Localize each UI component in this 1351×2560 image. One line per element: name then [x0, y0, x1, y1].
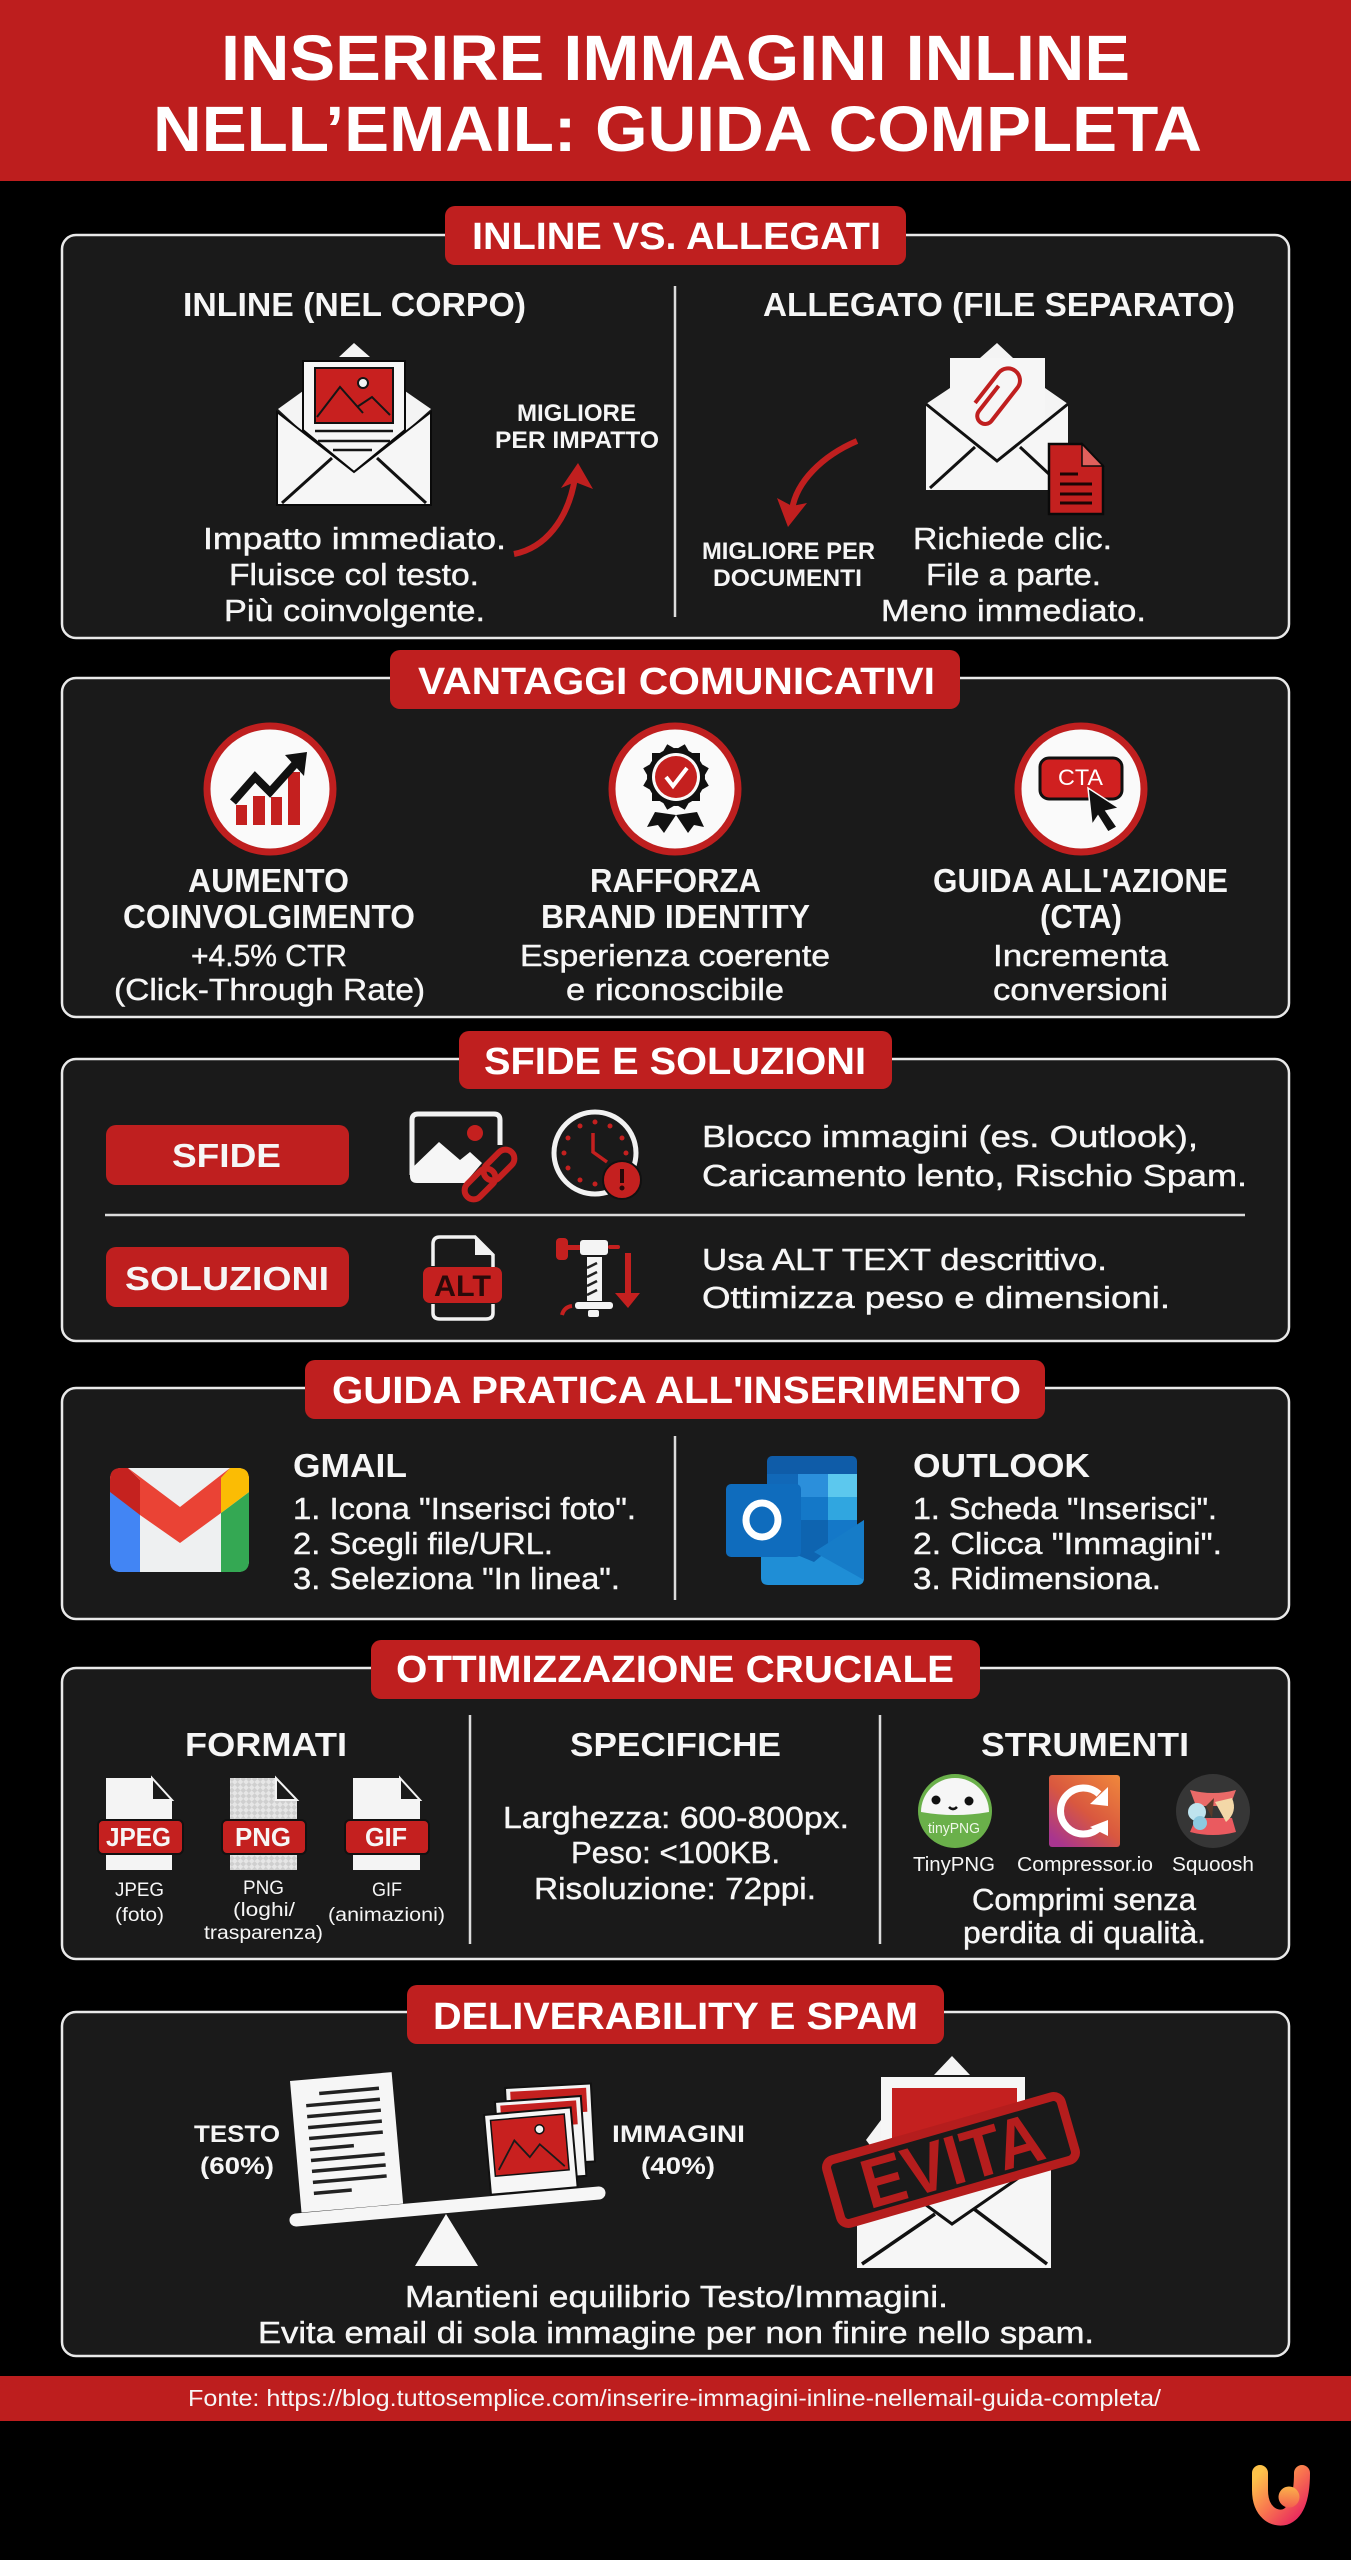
label: sfide [106, 1125, 349, 1185]
icon: brand logo [1260, 2473, 1302, 2518]
icon: jpeg file: JPEG [106, 1822, 171, 1852]
text: guida all'azione: GUIDA ALL'AZIONE [933, 862, 1228, 899]
text: format captions [115, 1878, 445, 1944]
title: NELL’EMAIL: GUIDA COMPLETA [153, 93, 1202, 165]
text: comprimi: perdita di qualità. [963, 1915, 1206, 1950]
icon: growth chart [207, 726, 333, 852]
panel: ottimizzazione cruciale [62, 1640, 1289, 1959]
callout: migliore per impatto [495, 400, 659, 454]
text: format captions: (animazioni) [328, 1905, 445, 1926]
title: INSERIRE IMMAGINI INLINE [221, 22, 1130, 94]
text: format captions: trasparenza) [204, 1923, 323, 1944]
text: soluzioni list [702, 1242, 1170, 1315]
text: rafforza brand identity: BRAND IDENTITY [541, 898, 810, 935]
icon: clock alert [554, 1112, 641, 1199]
column: specifiche [503, 1726, 849, 1906]
icon: cta button: CTA [1058, 765, 1103, 790]
panel: guida pratica [62, 1360, 1289, 1619]
callout: migliore per impatto: MIGLIORE [517, 400, 636, 427]
text: guida all'azione: Incrementa [993, 938, 1169, 973]
text: allegato notes [881, 521, 1146, 628]
text: specifiche values: Peso: <100KB. [571, 1835, 780, 1870]
label: immagini 40%: IMMAGINI [612, 2121, 745, 2148]
panel: sfide e soluzioni [62, 1031, 1289, 1341]
text: outlook steps: 2. Clicca "Immagini". [913, 1526, 1222, 1561]
column: strumenti [913, 1726, 1254, 1950]
text: aumento coinvolgimento: AUMENTO [188, 862, 349, 899]
text: tool names: TinyPNG [913, 1854, 995, 1876]
text: comprimi: Comprimi senza [972, 1882, 1197, 1917]
icon: text page [290, 2072, 403, 2212]
text: gmail steps: 2. Scegli file/URL. [293, 1526, 553, 1561]
icon: gif file [345, 1778, 429, 1870]
text: allegato notes: File a parte. [926, 557, 1101, 592]
column heading: allegato: ALLEGATO (FILE SEPARATO) [763, 286, 1235, 323]
text: rafforza brand identity: RAFFORZA [590, 862, 761, 899]
text: specifiche values: Risoluzione: 72ppi. [534, 1871, 816, 1906]
heading: inline vs allegati [445, 206, 906, 265]
icon: tinypng: tinyPNG [928, 1820, 980, 1837]
text: sfide list: Caricamento lento, Rischio Spam. [702, 1158, 1247, 1193]
text: inline benefits: Impatto immediato. [203, 521, 506, 556]
callout: migliore per documenti: MIGLIORE PER [702, 538, 875, 565]
icon: tinypng [918, 1774, 992, 1848]
heading: deliverability: DELIVERABILITY E SPAM [433, 1996, 918, 2038]
text: aumento coinvolgimento [114, 862, 425, 1007]
text: guida all'azione: (CTA) [1040, 898, 1122, 935]
icon: compress clamp [556, 1238, 640, 1317]
heading: formati: FORMATI [185, 1726, 347, 1763]
arrow: to migliore per documenti [777, 441, 857, 527]
heading: guida pratica: GUIDA PRATICA ALL'INSERIMENTO [332, 1370, 1021, 1412]
icon: photo stack [484, 2083, 595, 2195]
heading: ottimizzazione cruciale: OTTIMIZZAZIONE CRUCIALE [396, 1649, 954, 1691]
text: rafforza brand identity [520, 862, 830, 1007]
text: format captions: JPEG [115, 1880, 164, 1901]
text: equilibrio: Evita email di sola immagine per non finire nello spam. [258, 2315, 1094, 2350]
footer source bar: Fonte: https://blog.tuttosemplice.com/inserire-immagini-inline-nellemail-guida-completa/ [188, 2385, 1162, 2411]
icon: envelope with inline image [277, 343, 431, 505]
icon: jpeg file [98, 1778, 183, 1870]
label: immagini 40%: (40%) [641, 2153, 715, 2180]
text: tool names: Compressor.io [1017, 1854, 1153, 1876]
icon: compressor.io [1049, 1775, 1120, 1847]
callout: migliore per impatto: PER IMPATTO [495, 427, 659, 454]
text: gmail steps: GMAIL [293, 1447, 407, 1484]
text: equilibrio [258, 2279, 1094, 2350]
text: aumento coinvolgimento: +4.5% CTR [191, 938, 347, 973]
text: equilibrio: Mantieni equilibrio Testo/Immagini. [405, 2279, 948, 2314]
text: rafforza brand identity: Esperienza coerente [520, 938, 830, 973]
label: testo 60%: TESTO [194, 2121, 280, 2148]
icon: alt text file: ALT [434, 1270, 491, 1303]
text: sfide list [702, 1119, 1247, 1193]
stamp: evita: EVITA [852, 2098, 1052, 2224]
label: soluzioni [106, 1247, 349, 1307]
heading: guida pratica [305, 1360, 1045, 1419]
text: specifiche values: Larghezza: 600-800px. [503, 1800, 849, 1835]
text: format captions: (loghi/ [233, 1900, 296, 1921]
callout: migliore per documenti: DOCUMENTI [713, 565, 862, 592]
text: gmail steps: 3. Seleziona "In linea". [293, 1561, 620, 1596]
panel: inline vs allegati [62, 206, 1289, 638]
text: tool names [913, 1854, 1254, 1876]
icon: png file: PNG [235, 1822, 291, 1852]
label: sfide: SFIDE [172, 1137, 281, 1174]
label: soluzioni: SOLUZIONI [125, 1260, 329, 1297]
heading: inline vs allegati: INLINE VS. ALLEGATI [472, 216, 881, 258]
header banner [0, 0, 1351, 181]
footer source bar [0, 2376, 1351, 2421]
text: soluzioni list: Ottimizza peso e dimensioni. [702, 1280, 1170, 1315]
heading: vantaggi comunicativi [390, 650, 960, 709]
icon: broken image link [410, 1114, 518, 1203]
text: guida all'azione: conversioni [993, 972, 1168, 1007]
title [153, 22, 1202, 165]
arrow: to migliore per impatto [514, 463, 593, 554]
column: formati [98, 1726, 445, 1944]
label: immagini 40% [612, 2121, 745, 2180]
panel: vantaggi comunicativi [62, 650, 1289, 1017]
text: comprimi [963, 1882, 1206, 1950]
icon: gif file: GIF [365, 1822, 407, 1852]
text: format captions: (foto) [115, 1905, 164, 1926]
heading: strumenti: STRUMENTI [981, 1726, 1189, 1763]
label: testo 60%: (60%) [200, 2153, 274, 2180]
text: format captions: GIF [372, 1880, 402, 1901]
icon: outlook logo [726, 1456, 864, 1585]
label: testo 60% [194, 2121, 280, 2180]
text: aumento coinvolgimento: (Click-Through Rate) [114, 972, 425, 1007]
icon: brand rosette [612, 726, 738, 852]
icon: balance scale [290, 2072, 599, 2266]
text: soluzioni list: Usa ALT TEXT descrittivo. [702, 1242, 1107, 1277]
text: format captions: PNG [243, 1878, 284, 1899]
heading: deliverability [407, 1985, 944, 2044]
callout: migliore per documenti [702, 538, 875, 592]
text: guida all'azione [933, 862, 1228, 1007]
heading: sfide e soluzioni: SFIDE E SOLUZIONI [484, 1041, 866, 1083]
icon: gmail logo [110, 1468, 249, 1572]
text: sfide list: Blocco immagini (es. Outlook), [702, 1119, 1198, 1154]
heading: ottimizzazione cruciale [371, 1640, 980, 1699]
text: outlook steps: 3. Ridimensiona. [913, 1561, 1161, 1596]
text: inline benefits: Più coinvolgente. [224, 593, 485, 628]
icon: envelope with evita stamp [823, 2056, 1079, 2268]
heading: vantaggi comunicativi: VANTAGGI COMUNICATIVI [418, 661, 935, 703]
text: inline benefits: Fluisce col testo. [229, 557, 479, 592]
column heading: inline: INLINE (NEL CORPO) [183, 286, 526, 323]
text: outlook steps: 1. Scheda "Inserisci". [913, 1491, 1217, 1526]
text: rafforza brand identity: e riconoscibile [566, 972, 784, 1007]
text: outlook steps [913, 1447, 1222, 1596]
icon: red document [1049, 444, 1103, 514]
text: outlook steps: OUTLOOK [913, 1447, 1090, 1484]
text: inline benefits [203, 521, 506, 628]
icon: alt text file [423, 1237, 502, 1319]
heading: sfide e soluzioni [459, 1031, 892, 1089]
text: allegato notes: Meno immediato. [881, 593, 1146, 628]
text: tool names: Squoosh [1172, 1854, 1254, 1876]
text: gmail steps: 1. Icona "Inserisci foto". [293, 1491, 636, 1526]
panel: deliverability e spam [62, 1985, 1289, 2356]
text: aumento coinvolgimento: COINVOLGIMENTO [123, 898, 415, 935]
icon: envelope with attachment [926, 343, 1068, 490]
icon: png file [222, 1778, 306, 1870]
text: gmail steps [293, 1447, 636, 1596]
text: specifiche values [503, 1800, 849, 1906]
icon: cta button [1018, 726, 1144, 852]
heading: specifiche: SPECIFICHE [570, 1726, 781, 1763]
text: allegato notes: Richiede clic. [913, 521, 1112, 556]
icon: squoosh [1176, 1774, 1250, 1848]
